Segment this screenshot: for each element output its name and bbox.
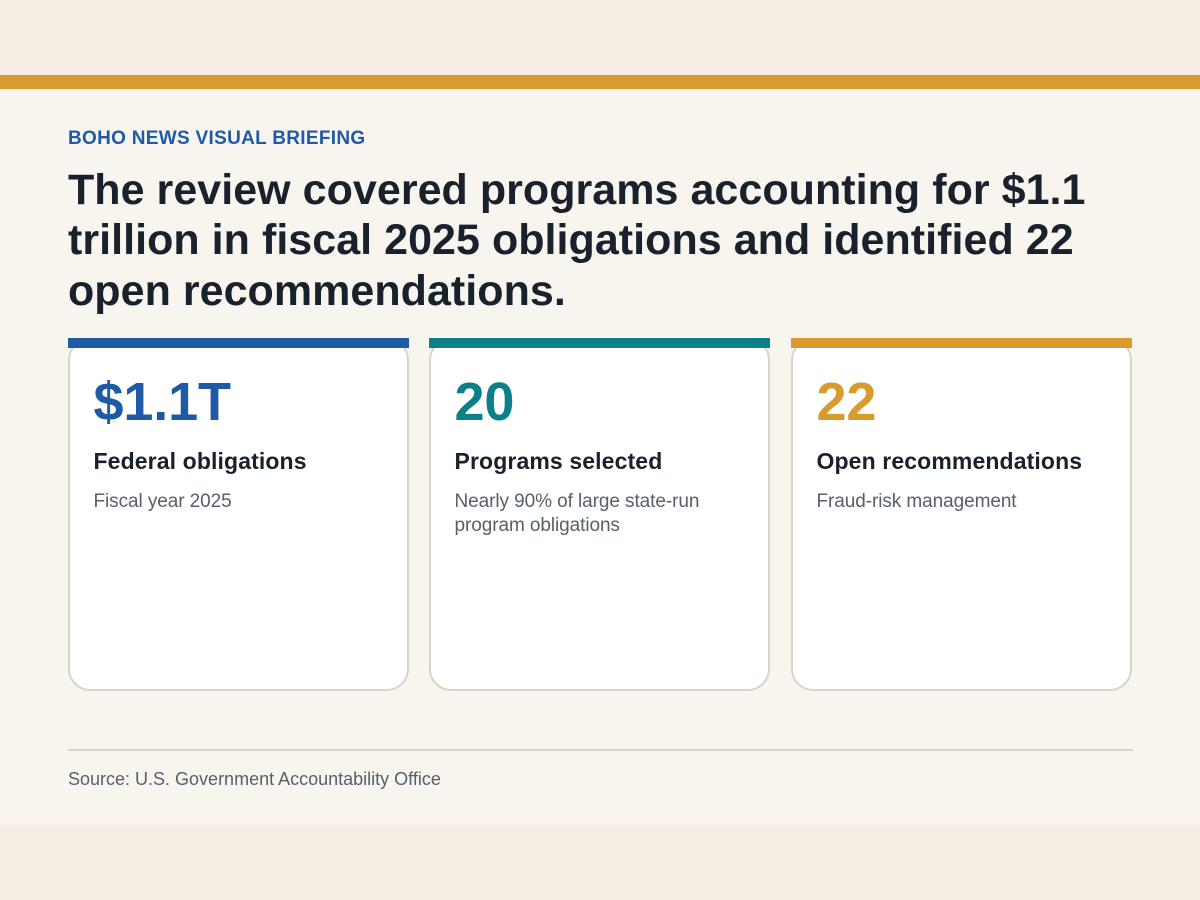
headline: The review covered programs accounting for $1.1 xyxy=(68,166,1085,214)
source line: Source: U.S. Government Accountability Office xyxy=(68,769,441,789)
stat: 20: 20 xyxy=(454,372,514,432)
note: fiscal year: Fiscal year 2025 xyxy=(94,491,232,512)
card: programs selected xyxy=(429,338,770,691)
label: federal obligations: Federal obligations xyxy=(94,448,307,474)
note: fraud-risk management: Fraud-risk management xyxy=(816,491,1017,512)
headline: open recommendations. xyxy=(68,267,566,315)
headline xyxy=(68,166,1085,315)
label: open recommendations: Open recommendations xyxy=(816,448,1082,474)
stat: $1.1T: $1.1T xyxy=(94,372,231,432)
footer divider xyxy=(68,749,1133,751)
card: federal obligations xyxy=(68,338,409,691)
top accent band xyxy=(0,75,1200,89)
label: programs selected: Programs selected xyxy=(454,448,662,474)
note: share of obligations: program obligations xyxy=(454,515,620,536)
note: share of obligations xyxy=(454,491,699,536)
headline: trillion in fiscal 2025 obligations and identified 22 xyxy=(68,216,1074,264)
eyebrow: publication label: BOHO NEWS VISUAL BRIEFING xyxy=(68,128,365,148)
card: open recommendations xyxy=(791,338,1132,691)
note: share of obligations: Nearly 90% of large state-run xyxy=(454,491,699,512)
stat: 22: 22 xyxy=(816,372,876,432)
